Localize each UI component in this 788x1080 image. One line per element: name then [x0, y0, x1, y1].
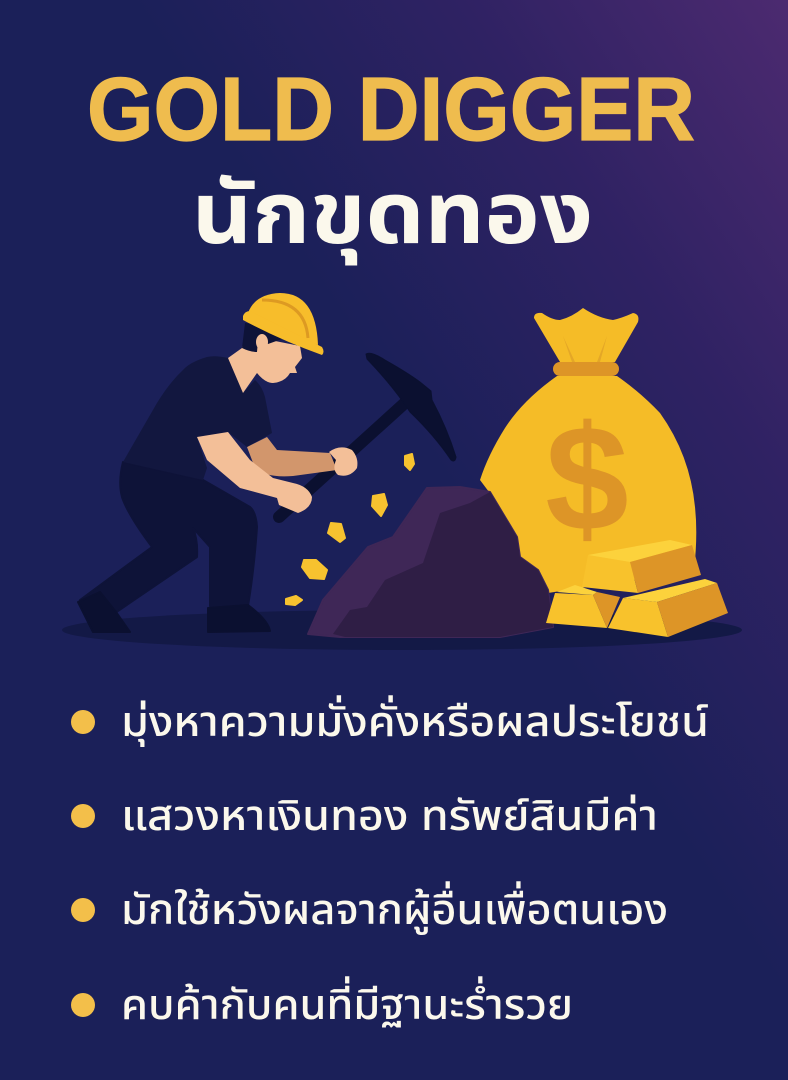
- shirt: [123, 356, 272, 480]
- back arm: [247, 437, 337, 476]
- title: GOLD DIGGER: GOLD DIGGER: [87, 60, 695, 160]
- hair: [242, 323, 282, 352]
- bag tie: [553, 362, 619, 376]
- front shoe: [208, 605, 270, 632]
- bar: bottom left: [546, 585, 620, 628]
- head: [228, 335, 302, 393]
- trousers: [80, 462, 257, 613]
- front arm: [197, 432, 312, 513]
- bullet list: [71, 695, 709, 1028]
- bullet 4: คบค้ากับคนที่มีฐานะร่ำรวย: [121, 976, 573, 1028]
- dollar sign: $: [545, 394, 629, 562]
- hand: [329, 447, 357, 476]
- bar: top: [582, 540, 701, 593]
- bullet 1: มุ่งหาความมั่งคั่งหรือผลประโยชน์: [121, 695, 709, 747]
- bullet 2: แสวงหาเงินทอง ทรัพย์สินมีค่า: [121, 792, 658, 839]
- bullet 3: มักใช้หวังผลจากผู้อื่นเพื่อตนเอง: [121, 881, 668, 935]
- pickaxe: [279, 353, 456, 517]
- bag top: [534, 308, 638, 362]
- rock: [308, 487, 553, 637]
- bar: bottom right: [608, 579, 728, 637]
- ground shadow: [62, 610, 742, 650]
- bag folds: [563, 336, 607, 362]
- subtitle: Thai: นักขุดทอง: [192, 166, 593, 265]
- helmet: [243, 293, 324, 355]
- gold bars: [546, 540, 728, 637]
- ear: [256, 334, 268, 350]
- gold nuggets: [286, 454, 414, 605]
- back shoe: [78, 592, 130, 632]
- illustration: miner: [78, 293, 456, 632]
- bag body: [480, 376, 696, 593]
- money bag: [480, 308, 696, 593]
